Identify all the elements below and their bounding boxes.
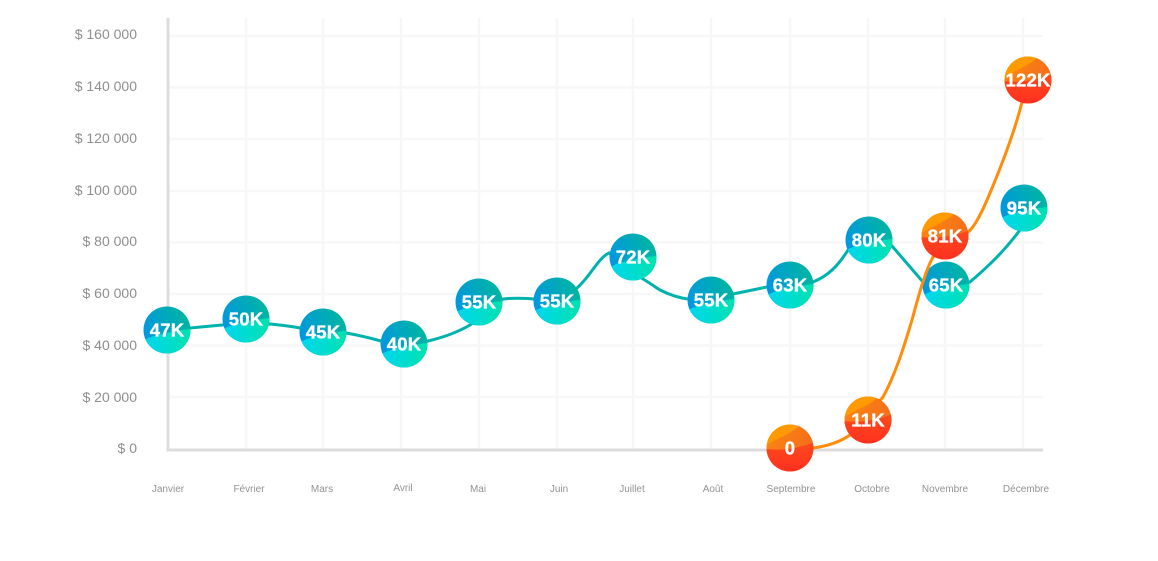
x axis labels: Novembre [922, 484, 968, 495]
x axis labels: Mai [470, 484, 486, 495]
teal markers: 65K [929, 274, 964, 296]
orange markers: 0 [785, 438, 795, 458]
x axis labels: Août [703, 484, 724, 495]
x axis labels: Mars [311, 484, 333, 495]
y axis labels: $ 20 000 [82, 389, 137, 405]
teal markers: 63K [773, 274, 808, 296]
y axis labels [75, 26, 137, 456]
teal markers: 55K [694, 290, 729, 310]
x axis labels: Avril [393, 483, 413, 494]
y axis labels: $ 120 000 [75, 130, 137, 146]
orange markers: 81K [928, 226, 963, 246]
y axis labels: $ 60 000 [82, 285, 137, 301]
x axis labels: Octobre [854, 484, 890, 495]
teal markers: 50K [229, 308, 264, 330]
teal markers: 95K [1007, 198, 1042, 218]
y axis labels: $ 160 000 [75, 26, 137, 42]
teal markers: 80K [852, 230, 887, 250]
teal markers: 55K [540, 290, 575, 312]
y axis labels: $ 140 000 [75, 78, 137, 94]
orange markers: 11K [851, 410, 885, 430]
teal markers: 40K [387, 334, 422, 354]
x axis labels: Juin [550, 484, 568, 495]
teal markers: 72K [616, 246, 651, 268]
teal markers: 47K [150, 320, 185, 340]
x axis labels: Janvier [152, 484, 185, 495]
orange markers: 122K [1005, 70, 1051, 90]
teal line [170, 230, 1020, 341]
x axis labels: Février [233, 484, 265, 495]
y axis labels: $ 40 000 [82, 337, 137, 353]
teal markers [144, 184, 1048, 368]
y axis labels: $ 100 000 [75, 182, 137, 198]
x axis labels: Juillet [619, 484, 645, 495]
y axis labels: $ 0 [118, 440, 137, 456]
x axis labels [152, 483, 1049, 495]
teal markers: 45K [306, 322, 341, 342]
axes [168, 18, 1043, 450]
y axis labels: $ 80 000 [82, 233, 137, 249]
orange markers [766, 56, 1052, 472]
orange line [790, 80, 1028, 448]
x axis labels: Décembre [1003, 484, 1049, 495]
teal markers: 55K [462, 292, 497, 312]
x axis labels: Septembre [767, 484, 816, 495]
